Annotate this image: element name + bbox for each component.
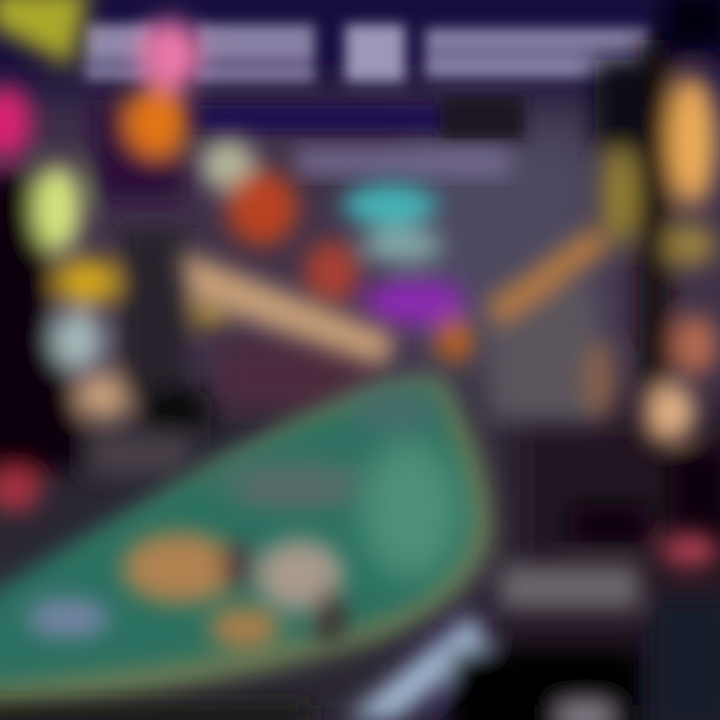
felt highlights [210, 388, 460, 580]
poker table [0, 375, 492, 715]
table rim [0, 375, 492, 715]
cards and chips [26, 476, 355, 650]
arm diagonal [180, 250, 395, 368]
left figures [0, 19, 226, 512]
icon: yellow corner shape [0, 0, 90, 68]
table felt [0, 388, 470, 685]
centre objects [200, 139, 475, 410]
panel: top banner title [80, 24, 650, 140]
right side machines [485, 0, 720, 560]
table edge and foreground [0, 505, 720, 720]
